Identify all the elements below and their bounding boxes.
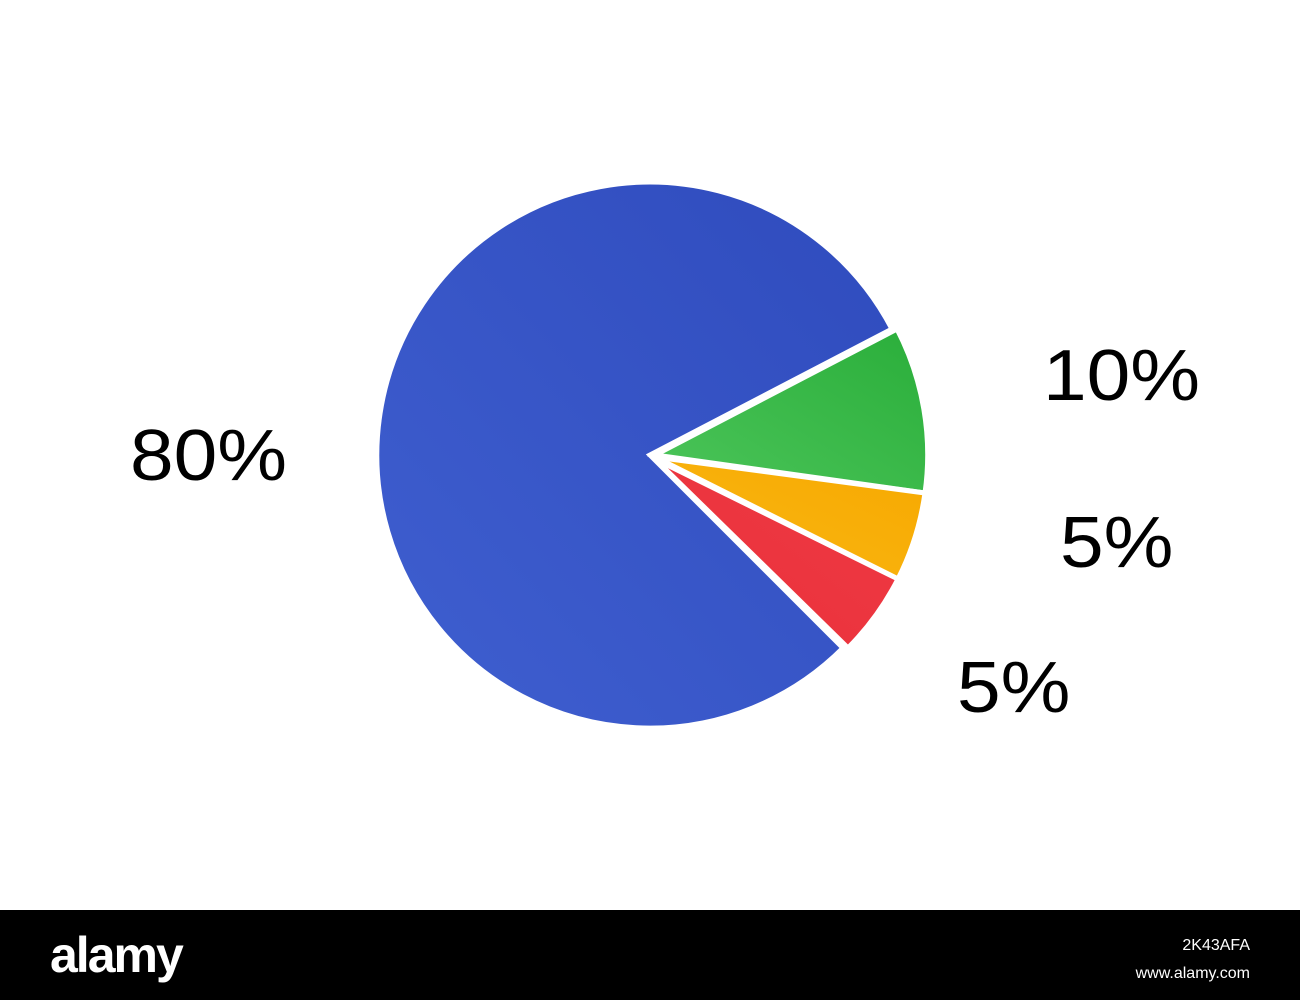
logo: alamy bbox=[50, 927, 182, 983]
slice: red 5% bbox=[655, 459, 898, 648]
label 5% yellow: 5% bbox=[1060, 503, 1173, 583]
image id: www.alamy.com bbox=[1136, 965, 1250, 982]
footer bar bbox=[0, 910, 1300, 1000]
label 10%: 10% bbox=[1043, 336, 1200, 416]
slice: green 10% bbox=[655, 329, 928, 493]
label 5% red: 5% bbox=[957, 648, 1070, 728]
image id bbox=[1136, 937, 1250, 982]
image id: 2K43AFA bbox=[1182, 937, 1250, 954]
label 80%: 80% bbox=[130, 416, 287, 496]
slice: blue 80% bbox=[377, 182, 892, 728]
slice: yellow 5% bbox=[655, 457, 925, 579]
